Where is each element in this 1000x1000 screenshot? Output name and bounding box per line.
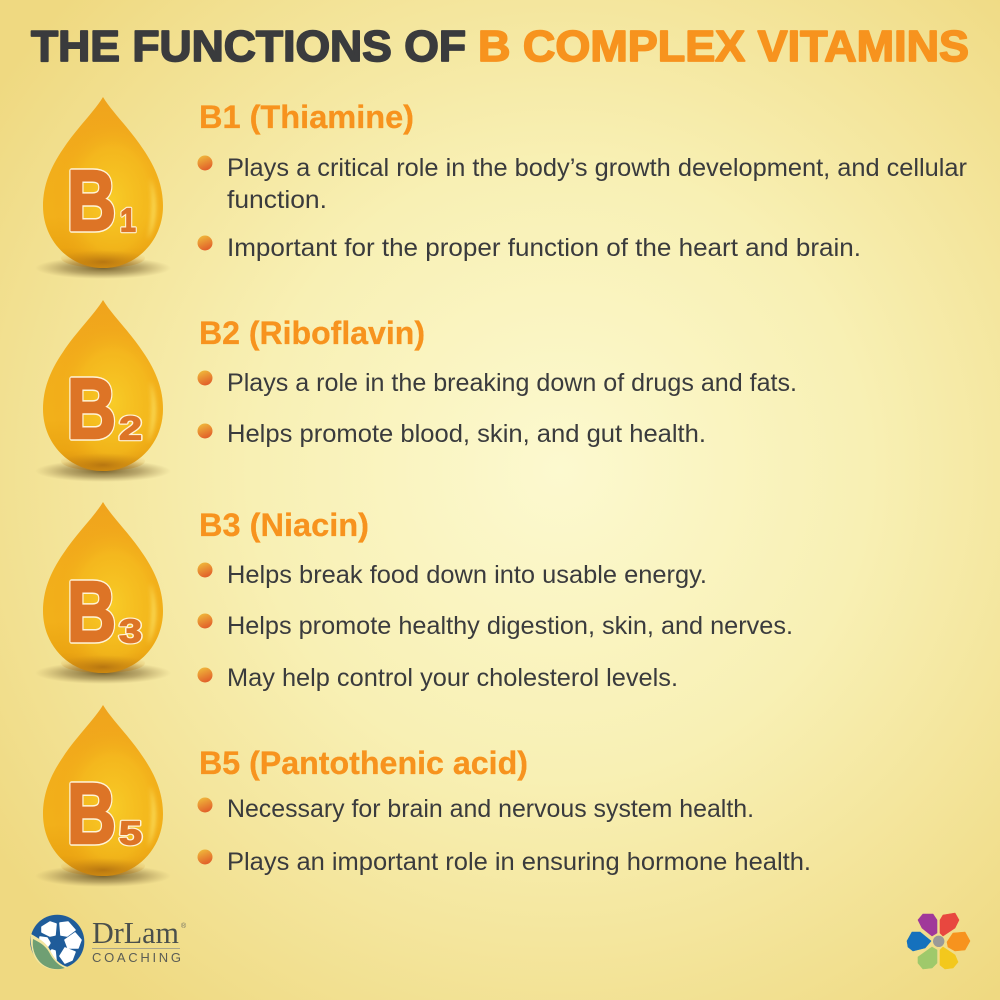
panel: B2 Riboflavin: [35, 300, 797, 482]
icon: B3 drop: [35, 502, 171, 684]
logo: DrLam Coaching: [30, 915, 187, 969]
bullet list: B5: [198, 795, 811, 876]
bullet list: B2: Plays a role in the breaking down of drugs and fats.: [227, 369, 797, 397]
bullet list: B1: [198, 154, 967, 262]
icon: B1 drop: 1: [120, 202, 136, 238]
bullet list: B3: Helps break food down into usable energy.: [227, 561, 707, 589]
wordmark: DrLam: [92, 915, 179, 950]
icon: B3 drop: B: [67, 565, 116, 660]
icon: B5 drop: B: [67, 767, 116, 862]
panel: B5 Pantothenic acid: [35, 705, 811, 887]
title: B COMPLEX VITAMINS: [478, 22, 969, 71]
wordmark: COACHING: [92, 950, 181, 965]
bullet list: B1: Important for the proper function of the heart and brain.: [227, 234, 861, 262]
panel: B3 Niacin: [35, 502, 793, 692]
icon: B1 drop: 1: [120, 202, 136, 238]
panel: B1 Thiamine: [35, 97, 967, 279]
bullet list: B1: function.: [227, 186, 327, 214]
icon: B3 drop: B: [67, 565, 116, 660]
icon: B5 drop: B: [67, 767, 116, 862]
bullet list: B3: [198, 561, 793, 692]
heading: B3 (Niacin): B3 (Niacin): [199, 507, 369, 543]
icon: B2 drop: 2: [119, 410, 142, 446]
bullet list: B5: Plays an important role in ensuring hormone health.: [227, 848, 811, 876]
bullet list: B5: Necessary for brain and nervous system health.: [227, 795, 754, 823]
bullet list: B2: [198, 369, 797, 448]
icon: B2 drop: 2: [119, 410, 142, 446]
logo: colourful flower: [907, 913, 970, 969]
icon: B1 drop: [35, 97, 171, 279]
icon: B1 drop: B: [67, 154, 116, 249]
title: THE FUNCTIONS OF: [31, 22, 466, 71]
icon: B5 drop: [35, 705, 171, 887]
heading: B1 (Thiamine): B1 (Thiamine): [199, 99, 414, 135]
wordmark: ®: [181, 922, 187, 930]
icon: B3 drop: 3: [119, 612, 142, 650]
emblem centre: [50, 936, 64, 948]
icon: B5 drop: 5: [119, 814, 142, 852]
bullet list: B3: May help control your cholesterol levels.: [227, 664, 678, 692]
icon: B2 drop: B: [67, 362, 116, 457]
icon: B3 drop: 3: [119, 612, 142, 650]
heading: B2 (Riboflavin): B2 (Riboflavin): [199, 315, 425, 351]
icon: B2 drop: [35, 300, 171, 482]
bullet list: B1: Plays a critical role in the body’s growth development, and cellular: [227, 154, 967, 182]
icon: B5 drop: 5: [119, 814, 142, 852]
title: [31, 22, 969, 71]
icon: B1 drop: B: [67, 154, 116, 249]
wordmark: [92, 915, 187, 965]
bullet list: B3: Helps promote healthy digestion, skin, and nerves.: [227, 612, 793, 640]
icon: DrLam flower emblem: [30, 915, 84, 969]
heading: B5 (Pantothenic acid): B5 (Pantothenic acid): [199, 745, 528, 781]
bullet list: B2: Helps promote blood, skin, and gut health.: [227, 420, 706, 448]
icon: B2 drop: B: [67, 362, 116, 457]
